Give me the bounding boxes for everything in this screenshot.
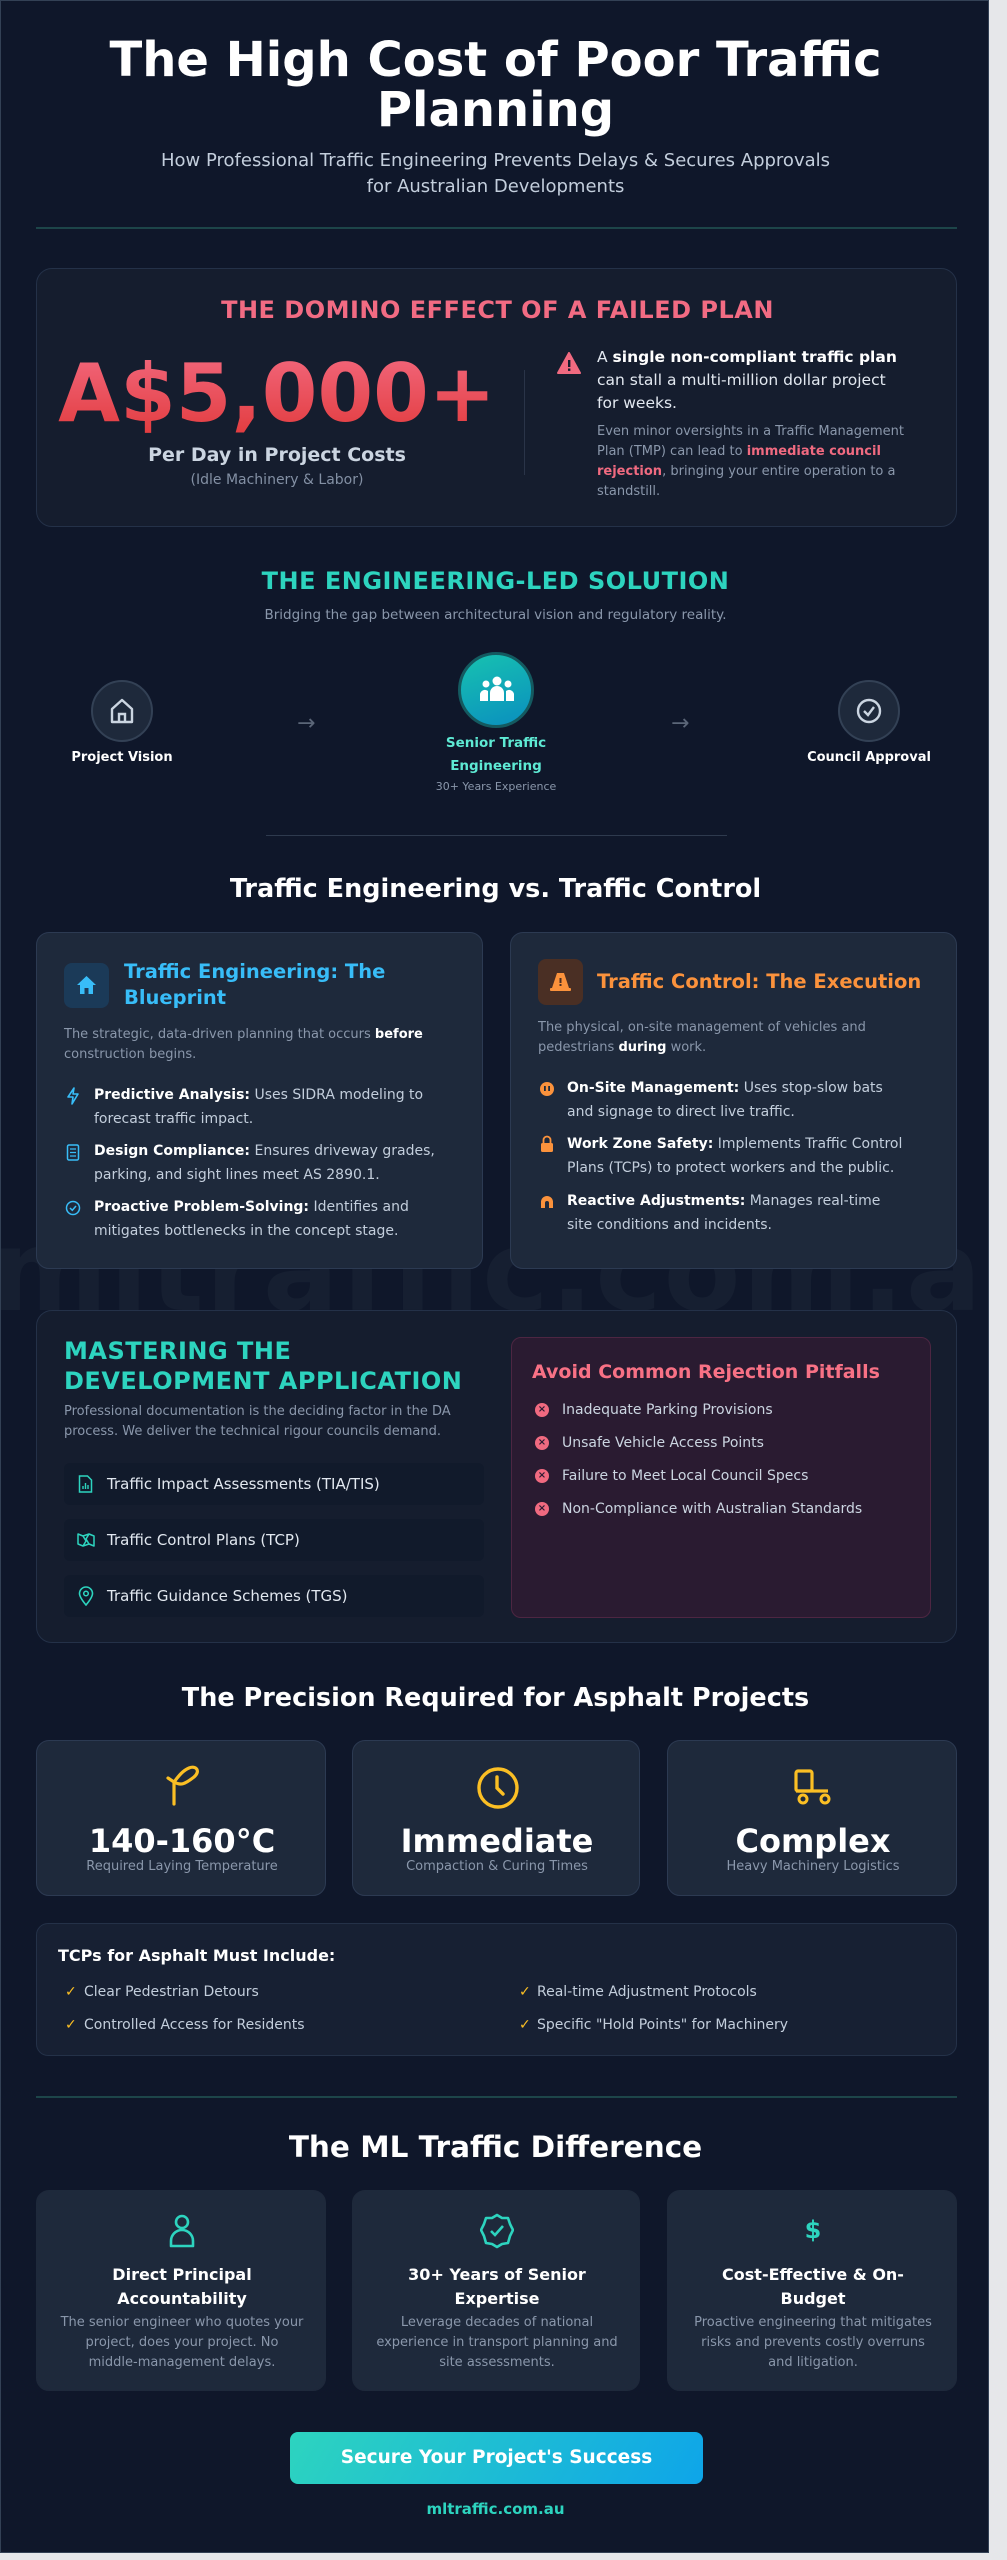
checklist: ✓ bbox=[519, 1984, 531, 2000]
description: construction begins. bbox=[64, 1047, 196, 1062]
icon: warning bbox=[557, 352, 581, 374]
item: TCP: Traffic Control Plans (TCP) bbox=[107, 1531, 300, 1549]
icon: house bbox=[91, 680, 153, 742]
flow: senior traffic engineering bbox=[436, 652, 556, 793]
card: senior expertise: 30+ Years of Senior bbox=[408, 2265, 586, 2284]
heading: domino: THE DOMINO EFFECT OF A FAILED PLAN bbox=[221, 296, 774, 324]
panel: TCP must include bbox=[36, 1923, 957, 2056]
item: TIA: Traffic Impact Assessments (TIA/TIS) bbox=[107, 1475, 380, 1493]
title: Planning bbox=[377, 82, 614, 138]
icon: team bbox=[458, 652, 534, 728]
bullet: on-site bbox=[540, 1080, 883, 1120]
bullet: compliance: Design Compliance: Ensures driveway grades, bbox=[94, 1143, 435, 1159]
card: direct accountability: middle-management delays. bbox=[89, 2355, 275, 2370]
heading: engineering vs control: Traffic Engineering vs. Traffic Control bbox=[230, 874, 761, 904]
heading: ML traffic difference: The ML Traffic Difference bbox=[289, 2130, 702, 2164]
pitfall list: × bbox=[538, 1404, 546, 1415]
checklist: Specific "Hold Points" for Machinery bbox=[537, 2017, 788, 2033]
bullet: work zone: Work Zone Safety: Implements Traffic Control bbox=[567, 1136, 902, 1152]
item: TIA bbox=[64, 1463, 484, 1505]
card: direct accountability: The senior engineer who quotes your bbox=[61, 2315, 303, 2330]
description: pedestrians during work. bbox=[538, 1040, 706, 1055]
stat card: immediate: Immediate bbox=[401, 1822, 593, 1860]
pitfall list: Unsafe Vehicle Access Points bbox=[562, 1435, 764, 1451]
flow: council approval bbox=[807, 680, 931, 765]
warning detail: Even minor oversights in a Traffic Management bbox=[597, 424, 904, 439]
stat card: complex bbox=[667, 1740, 957, 1896]
heading: engineering-led solution: THE ENGINEERING-LED SOLUTION bbox=[262, 567, 729, 595]
pitfall list: × bbox=[538, 1470, 546, 1481]
description bbox=[538, 1020, 866, 1055]
checklist: ✓ bbox=[519, 2017, 531, 2033]
bullet: reactive: site conditions and incidents. bbox=[567, 1216, 772, 1232]
checklist: ✓ bbox=[65, 1984, 77, 2000]
warning text bbox=[597, 348, 897, 412]
pitfall list: Failure to Meet Local Council Specs bbox=[562, 1468, 808, 1484]
icon: badge check bbox=[480, 2214, 514, 2248]
warning detail: rejection, bringing your entire operation to a bbox=[597, 464, 895, 479]
warning text: for weeks. bbox=[597, 394, 677, 412]
title: The High Cost of Poor Traffic bbox=[109, 32, 882, 88]
stat card: complex: Heavy Machinery Logistics bbox=[726, 1859, 900, 1874]
description: process. We deliver the technical rigour councils demand. bbox=[64, 1424, 441, 1439]
pitfall list: Non-Compliance with Australian Standards bbox=[562, 1501, 862, 1517]
stat card: immediate: Compaction & Curing Times bbox=[406, 1859, 588, 1874]
pitfall list bbox=[535, 1402, 862, 1517]
bullet: problem solving: mitigates bottlenecks in the concept stage. bbox=[94, 1222, 398, 1238]
item: TGS bbox=[64, 1575, 484, 1617]
warning detail: Plan (TMP) can lead to immediate council bbox=[597, 444, 881, 459]
card: senior expertise: experience in transport planning and bbox=[376, 2335, 618, 2350]
big stat: A$5,000+ bbox=[58, 347, 496, 440]
card: direct accountability: project, does your project. No bbox=[86, 2335, 278, 2350]
icon: check circle bbox=[838, 680, 900, 742]
stat card: immediate bbox=[352, 1740, 640, 1896]
bullet: reactive: Reactive Adjustments: Manages real-time bbox=[567, 1193, 880, 1209]
checklist: Real-time Adjustment Protocols bbox=[537, 1984, 757, 2000]
panel: domino effect bbox=[36, 268, 957, 527]
card: senior expertise: Leverage decades of national bbox=[401, 2315, 593, 2330]
item: TCP bbox=[64, 1519, 484, 1561]
checklist: ✓ bbox=[65, 2017, 77, 2033]
description: The physical, on-site management of vehicles and bbox=[538, 1020, 866, 1035]
pitfall list: × bbox=[538, 1503, 546, 1514]
card: direct accountability: Accountability bbox=[117, 2289, 247, 2308]
pitfall list: Inadequate Parking Provisions bbox=[562, 1402, 773, 1418]
title: TCPs for Asphalt Must Include: bbox=[58, 1946, 335, 1965]
panel: rejection pitfalls bbox=[511, 1337, 931, 1618]
arrow: → bbox=[671, 711, 689, 736]
card: cost effective: risks and prevents costly overruns bbox=[701, 2335, 925, 2350]
heading: DEVELOPMENT APPLICATION bbox=[64, 1367, 462, 1395]
stat card: temperature bbox=[36, 1740, 326, 1896]
bullet: predictive: forecast traffic impact. bbox=[94, 1110, 253, 1126]
heading: asphalt precision: The Precision Required for Asphalt Projects bbox=[182, 1683, 809, 1713]
title: Traffic Control: The Execution bbox=[597, 970, 921, 993]
button: CTA bbox=[290, 2432, 703, 2484]
card: cost effective: Cost-Effective & On- bbox=[722, 2265, 904, 2284]
flow: senior traffic engineering: Senior Traffic bbox=[446, 735, 546, 751]
card: cost effective bbox=[667, 2190, 957, 2391]
card: senior expertise: Expertise bbox=[455, 2289, 539, 2308]
bullet: predictive bbox=[67, 1087, 423, 1126]
flow: senior traffic engineering: Engineering bbox=[450, 758, 542, 774]
icon: machinery bbox=[794, 1769, 830, 1804]
icon: dollar: $ bbox=[805, 2216, 821, 2244]
stat note: (Idle Machinery & Labor) bbox=[191, 472, 363, 488]
icon: house box bbox=[64, 963, 109, 1008]
stat card: complex: Complex bbox=[735, 1822, 891, 1860]
icon: person bbox=[170, 2214, 194, 2248]
description: The strategic, data-driven planning that occurs before bbox=[64, 1027, 423, 1042]
subtitle: How Professional Traffic Engineering Prevents Delays & Secures Approvals bbox=[161, 150, 830, 171]
checklist: Clear Pedestrian Detours bbox=[84, 1984, 259, 2000]
card: direct accountability: Direct Principal bbox=[112, 2265, 252, 2284]
panel: traffic control bbox=[510, 932, 957, 1269]
bullet: reactive bbox=[541, 1193, 880, 1232]
heading bbox=[64, 1337, 462, 1395]
warning detail: standstill. bbox=[597, 484, 660, 499]
flow: project vision bbox=[71, 680, 173, 765]
bullet: on-site: On-Site Management: Uses stop-slow bats bbox=[567, 1080, 883, 1096]
subtitle bbox=[161, 150, 830, 197]
heading: MASTERING THE bbox=[64, 1337, 291, 1365]
icon: thermometer probe bbox=[166, 1766, 199, 1806]
panel: traffic engineering bbox=[36, 932, 483, 1269]
bullet: compliance bbox=[66, 1143, 435, 1182]
title: Blueprint bbox=[124, 986, 226, 1009]
stat card: temperature: 140-160°C bbox=[89, 1822, 275, 1860]
card: senior expertise bbox=[352, 2190, 640, 2391]
warning text: can stall a multi-million dollar project bbox=[597, 371, 886, 389]
button: CTA: Secure Your Project's Success bbox=[341, 2447, 652, 2468]
description bbox=[64, 1027, 423, 1062]
card: senior expertise: site assessments. bbox=[439, 2355, 555, 2370]
website link: mltraffic.com.au bbox=[426, 2500, 565, 2518]
bullet: work zone: Plans (TCPs) to protect workers and the public. bbox=[567, 1160, 894, 1176]
solution subtitle: Bridging the gap between architectural vision and regulatory reality. bbox=[264, 607, 727, 623]
icon: clock bbox=[477, 1767, 519, 1809]
subtitle: for Australian Developments bbox=[367, 176, 624, 197]
checklist bbox=[65, 1984, 788, 2033]
item: TGS: Traffic Guidance Schemes (TGS) bbox=[107, 1587, 348, 1605]
stat label: Per Day in Project Costs bbox=[148, 444, 406, 466]
title bbox=[124, 960, 385, 1009]
description: Professional documentation is the deciding factor in the DA bbox=[64, 1404, 451, 1419]
description bbox=[64, 1404, 451, 1439]
title: Avoid Common Rejection Pitfalls bbox=[532, 1361, 880, 1383]
stat card: temperature: Required Laying Temperature bbox=[86, 1859, 278, 1874]
pitfall list: × bbox=[538, 1437, 546, 1448]
bullet: problem solving bbox=[66, 1199, 409, 1238]
bullet: on-site: and signage to direct live traffic. bbox=[567, 1104, 795, 1120]
bullet: work zone bbox=[541, 1136, 902, 1176]
warning text: A single non-compliant traffic plan bbox=[597, 348, 897, 366]
bullet: predictive: Predictive Analysis: Uses SIDRA modeling to bbox=[94, 1087, 423, 1103]
bullet: compliance: parking, and sight lines meet AS 2890.1. bbox=[94, 1166, 380, 1182]
card: cost effective: Budget bbox=[780, 2289, 846, 2308]
flow: council approval: Council Approval bbox=[807, 750, 931, 765]
card: direct accountability bbox=[36, 2190, 326, 2391]
flow: project vision: Project Vision bbox=[71, 750, 173, 765]
title: Traffic Engineering: The bbox=[124, 960, 385, 983]
panel: development application bbox=[36, 1310, 957, 1643]
icon: cone box bbox=[538, 959, 583, 1005]
flow: senior traffic engineering: 30+ Years Experience bbox=[436, 780, 556, 793]
title bbox=[109, 32, 882, 138]
warning detail bbox=[597, 424, 904, 499]
bullet: problem solving: Proactive Problem-Solving: Identifies and bbox=[94, 1199, 409, 1215]
card: cost effective: and litigation. bbox=[768, 2355, 858, 2370]
checklist: Controlled Access for Residents bbox=[84, 2017, 305, 2033]
arrow: → bbox=[297, 711, 315, 736]
card: cost effective: Proactive engineering that mitigates bbox=[694, 2315, 932, 2330]
